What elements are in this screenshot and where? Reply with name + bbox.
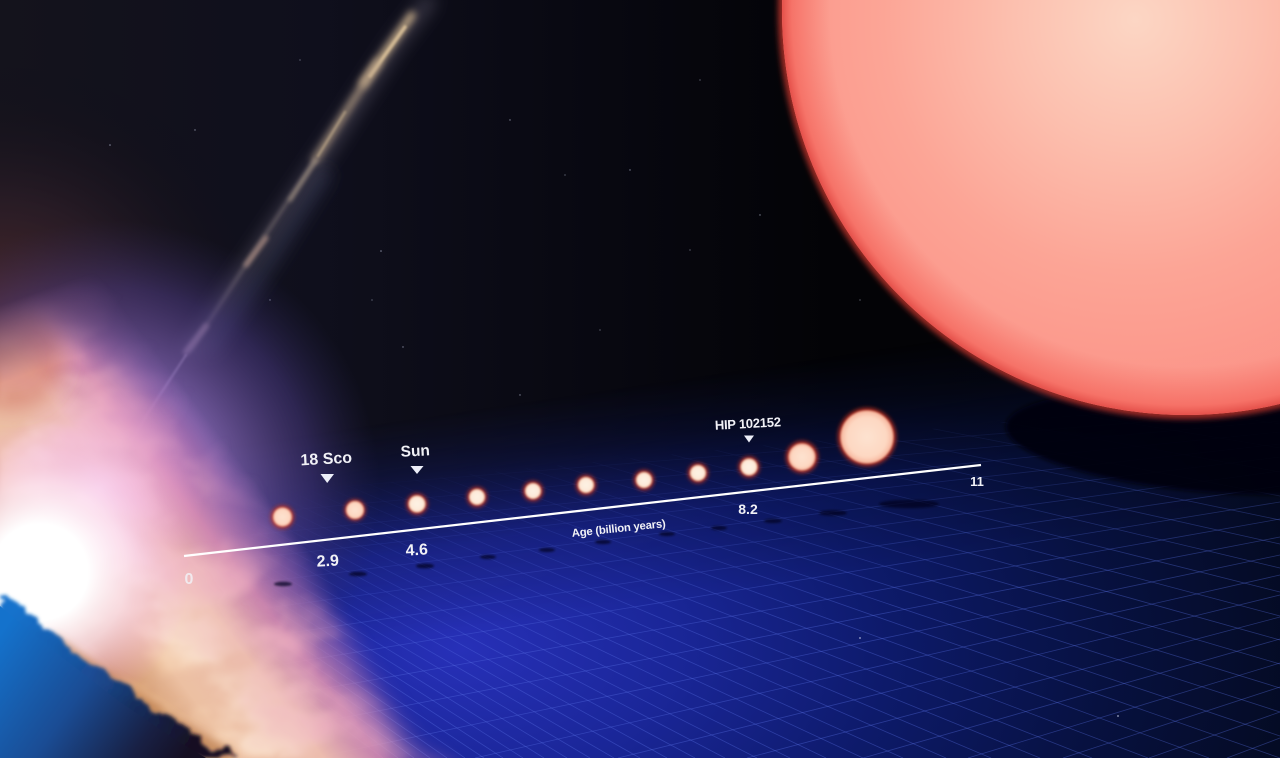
- explosion: soft pink bloom: [0, 385, 205, 595]
- icon: red giant star: [782, 0, 1280, 415]
- tick label: 2.9: 2.9: [316, 552, 339, 571]
- background: reddish glow on left edge: [0, 0, 400, 700]
- background stars: [109, 59, 1119, 717]
- explosion: orange fringe along the lower edge: [50, 640, 232, 758]
- axis title: Age (billion years): Age (billion years): [571, 518, 667, 540]
- star shadows on the grid: [274, 500, 939, 586]
- diffraction beam across the sky: [85, 2, 428, 520]
- explosion: purple glow: [0, 220, 400, 758]
- panel: blue grid floor: [248, 370, 1280, 758]
- arrow: Sun marker: [410, 466, 424, 474]
- tick label: 0: 0: [185, 571, 194, 588]
- tick label: 11: 11: [970, 474, 984, 489]
- label: 18 Sco: 18 Sco: [300, 450, 353, 469]
- axis line: age: [184, 465, 981, 556]
- arrow: HIP 102152 marker: [744, 436, 754, 442]
- explosion: blue hemisphere beneath the cloud: [0, 592, 236, 758]
- label: HIP 102152: HIP 102152: [714, 414, 781, 433]
- explosion: white hot core: [0, 422, 190, 722]
- arrow: 18 Sco marker: [320, 474, 334, 483]
- tick label: 8.2: 8.2: [738, 501, 758, 517]
- tick label: 4.6: 4.6: [405, 541, 428, 560]
- explosion: gas cloud band: [0, 289, 458, 758]
- star series: the Sun-like star at increasing ages: [271, 408, 896, 528]
- label: Sun: Sun: [400, 442, 430, 461]
- shadow of the red giant: [1001, 377, 1280, 509]
- icon: red giant glow: [778, 0, 1280, 419]
